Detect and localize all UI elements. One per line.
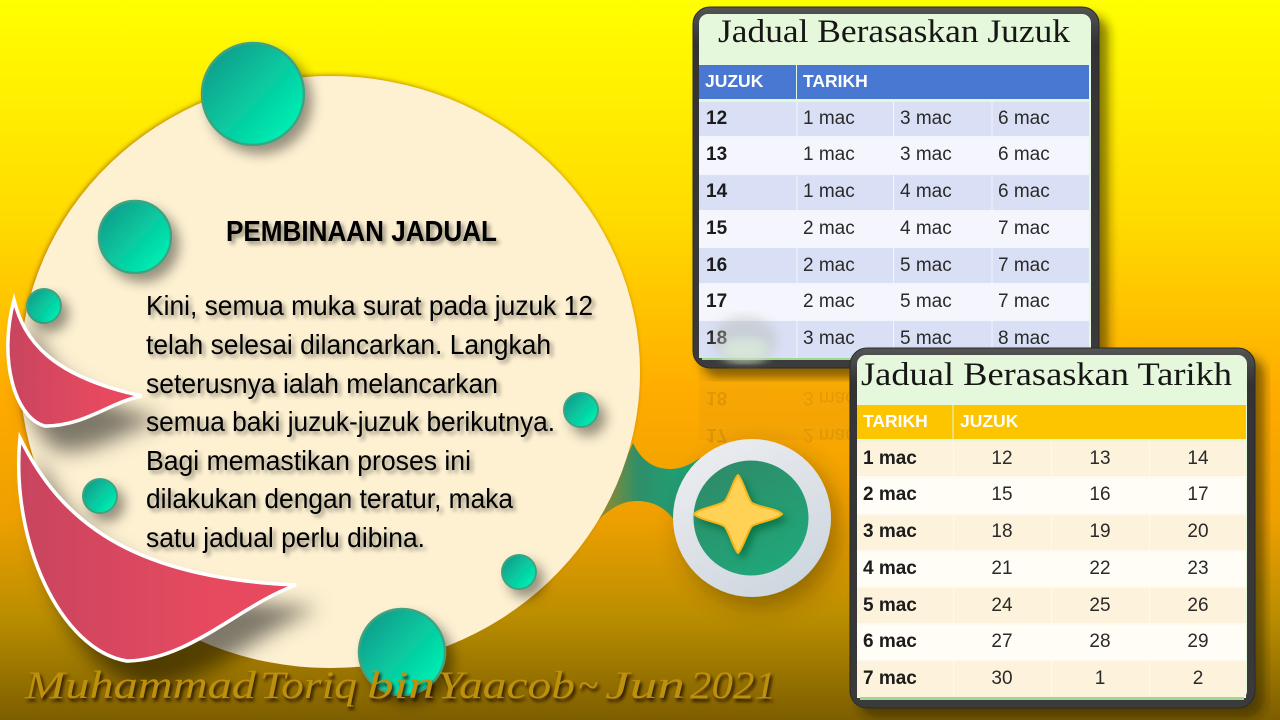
- panel: jadual berasaskan tarikh: Jadual Berasaskan Tarikh: [861, 357, 1233, 393]
- panel: jadual berasaskan tarikh: 26: [1187, 595, 1209, 616]
- body text: dilakukan dengan teratur, maka: [146, 483, 513, 514]
- author credit: bin: [367, 664, 435, 707]
- reflection of juzuk table: 3 mac: [803, 387, 855, 408]
- panel: jadual berasaskan juzuk: 7 mac: [998, 291, 1050, 312]
- panel: jadual berasaskan tarikh: 17: [1187, 484, 1209, 505]
- panel: jadual berasaskan tarikh: 28: [1089, 631, 1111, 652]
- body text: seterusnya ialah melancarkan: [146, 368, 498, 399]
- panel: jadual berasaskan tarikh: 1: [1095, 668, 1105, 689]
- panel: jadual berasaskan juzuk: 5 mac: [900, 328, 952, 349]
- panel: jadual berasaskan tarikh: 3 mac: [863, 521, 917, 542]
- star badge: [673, 439, 831, 597]
- main cream circle: [20, 76, 640, 668]
- panel: jadual berasaskan juzuk: 3 mac: [803, 328, 855, 349]
- reflection of juzuk table: [699, 368, 1091, 445]
- author credit: Muhammad: [24, 664, 257, 707]
- panel: jadual berasaskan juzuk: 6 mac: [998, 144, 1050, 165]
- panel: jadual berasaskan juzuk: [693, 7, 1099, 368]
- panel: jadual berasaskan tarikh: TARIKH: [863, 411, 928, 431]
- panel: jadual berasaskan juzuk: TARIKH: [803, 71, 868, 91]
- panel: jadual berasaskan juzuk: 2 mac: [803, 218, 855, 239]
- panel: jadual berasaskan tarikh: 27: [991, 631, 1013, 652]
- panel: jadual berasaskan tarikh: 30: [991, 668, 1013, 689]
- connector band: [598, 443, 700, 530]
- author credit: ~: [578, 664, 598, 707]
- panel: jadual berasaskan juzuk: 12: [706, 108, 727, 129]
- panel: jadual berasaskan juzuk: 1 mac: [803, 108, 855, 129]
- panel: jadual berasaskan tarikh: 25: [1089, 595, 1111, 616]
- panel: jadual berasaskan tarikh: 12: [991, 448, 1013, 469]
- panel: jadual berasaskan tarikh: 15: [991, 484, 1013, 505]
- panel: jadual berasaskan tarikh: 4 mac: [863, 558, 917, 579]
- panel: jadual berasaskan tarikh: 5 mac: [863, 595, 917, 616]
- panel: jadual berasaskan juzuk: 8 mac: [998, 328, 1050, 349]
- panel: jadual berasaskan juzuk: 16: [706, 255, 727, 276]
- panel: jadual berasaskan tarikh: 6 mac: [863, 631, 917, 652]
- panel: jadual berasaskan tarikh: 29: [1187, 631, 1209, 652]
- panel: jadual berasaskan juzuk: 5 mac: [900, 291, 952, 312]
- panel: jadual berasaskan juzuk: 3 mac: [900, 108, 952, 129]
- panel: jadual berasaskan tarikh: 20: [1187, 521, 1209, 542]
- panel: jadual berasaskan tarikh: 13: [1089, 448, 1111, 469]
- red upper swoosh: [8, 300, 142, 426]
- panel: jadual berasaskan juzuk: 14: [706, 181, 728, 202]
- panel: jadual berasaskan tarikh: JUZUK: [960, 411, 1019, 431]
- panel: jadual berasaskan juzuk: 2 mac: [803, 255, 855, 276]
- panel: jadual berasaskan tarikh: 14: [1187, 448, 1209, 469]
- panel: jadual berasaskan juzuk: 13: [706, 144, 727, 165]
- body text: semua baki juzuk-juzuk berikutnya.: [146, 406, 555, 437]
- panel: jadual berasaskan juzuk: 18: [706, 328, 727, 349]
- panel: jadual berasaskan juzuk: 4 mac: [900, 218, 952, 239]
- body text: Kini, semua muka surat pada juzuk 12: [146, 290, 593, 321]
- panel: jadual berasaskan juzuk: 15: [706, 218, 728, 239]
- author credit: 2021: [690, 664, 776, 707]
- reflection of juzuk table: 17: [706, 424, 727, 445]
- body text: Bagi memastikan proses ini: [146, 445, 471, 476]
- author credit: Toriq: [260, 664, 357, 707]
- panel: jadual berasaskan juzuk: 6 mac: [998, 108, 1050, 129]
- panel: jadual berasaskan juzuk: 7 mac: [998, 255, 1050, 276]
- author credit: Yaacob: [437, 664, 575, 707]
- panel: jadual berasaskan tarikh: 22: [1089, 558, 1111, 579]
- panel: jadual berasaskan tarikh: 7 mac: [863, 668, 917, 689]
- panel: jadual berasaskan juzuk: 4 mac: [900, 181, 952, 202]
- panel: jadual berasaskan tarikh: 18: [991, 521, 1013, 542]
- panel: jadual berasaskan tarikh: 24: [991, 595, 1013, 616]
- author credit: Jun: [605, 664, 685, 707]
- panel: jadual berasaskan tarikh: 16: [1089, 484, 1111, 505]
- panel: jadual berasaskan juzuk: 3 mac: [900, 144, 952, 165]
- panel: jadual berasaskan tarikh: 2: [1193, 668, 1203, 689]
- red lower swoosh: [19, 438, 296, 661]
- faint portrait ghost: [713, 316, 777, 364]
- panel: jadual berasaskan juzuk: Jadual Berasaskan Juzuk: [718, 14, 1071, 50]
- panel: jadual berasaskan juzuk: 7 mac: [998, 218, 1050, 239]
- panel: jadual berasaskan tarikh: 21: [991, 558, 1013, 579]
- panel: jadual berasaskan tarikh: 23: [1187, 558, 1209, 579]
- panel: jadual berasaskan juzuk: 5 mac: [900, 255, 952, 276]
- reflection of juzuk table: 2 mac: [803, 424, 855, 445]
- decorative teal circles: [27, 43, 598, 695]
- body text: telah selesai dilancarkan. Langkah: [146, 329, 551, 360]
- panel: jadual berasaskan juzuk: JUZUK: [705, 71, 764, 91]
- panel: jadual berasaskan tarikh: [850, 348, 1255, 708]
- reflection of juzuk table: 18: [706, 387, 727, 408]
- panel: jadual berasaskan juzuk: 2 mac: [803, 291, 855, 312]
- body text: satu jadual perlu dibina.: [146, 522, 425, 553]
- panel: jadual berasaskan juzuk: 1 mac: [803, 181, 855, 202]
- body text: [146, 290, 593, 553]
- panel: jadual berasaskan juzuk: 6 mac: [998, 181, 1050, 202]
- panel: jadual berasaskan tarikh: 1 mac: [863, 448, 917, 469]
- author credit: [24, 664, 776, 707]
- panel: jadual berasaskan juzuk: 17: [706, 291, 727, 312]
- panel: jadual berasaskan juzuk: 1 mac: [803, 144, 855, 165]
- panel: jadual berasaskan tarikh: 2 mac: [863, 484, 917, 505]
- heading: PEMBINAAN JADUAL: [226, 216, 497, 248]
- panel: jadual berasaskan tarikh: 19: [1089, 521, 1111, 542]
